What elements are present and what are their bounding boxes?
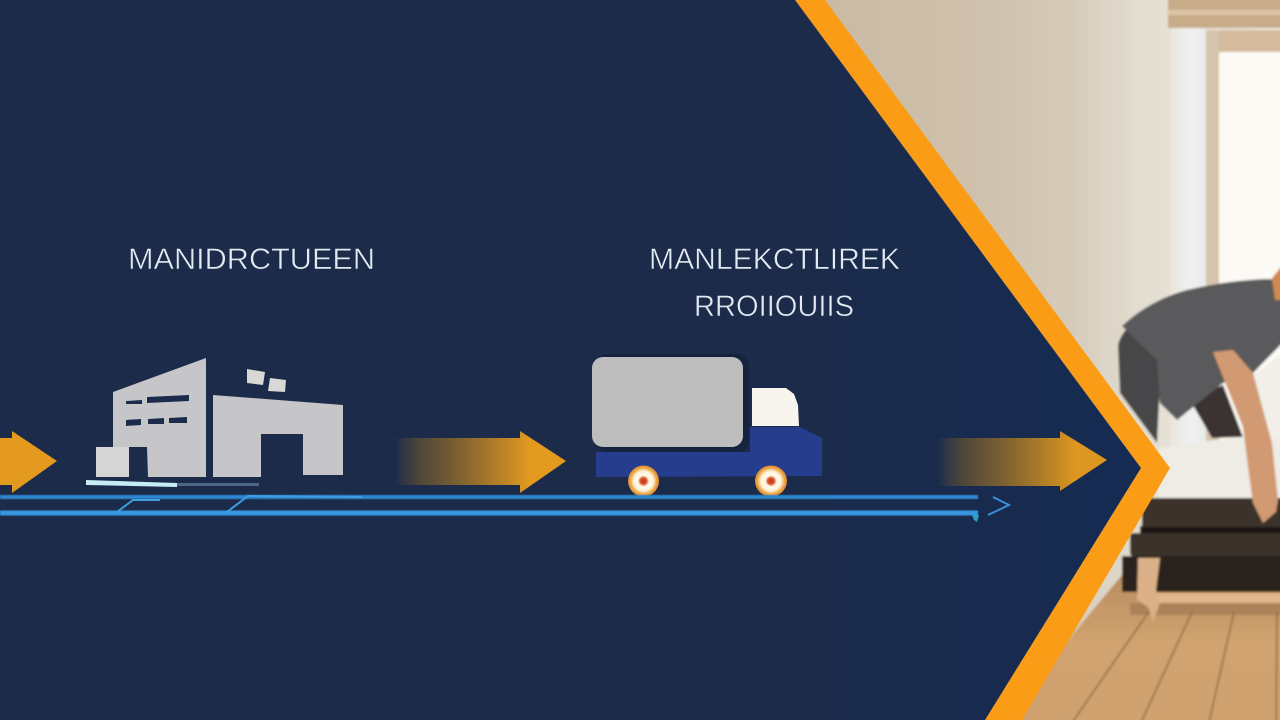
front wheel bbox=[755, 466, 787, 496]
right factory block bbox=[213, 395, 343, 477]
cargo box shadow bbox=[596, 354, 749, 452]
rear wheel bbox=[628, 466, 659, 496]
left factory block bbox=[113, 358, 206, 477]
heading: second step label: MANLEKCTLIREK bbox=[649, 243, 900, 276]
bed bbox=[1122, 498, 1280, 622]
person bbox=[1118, 262, 1280, 523]
wooden floor bbox=[985, 575, 1280, 720]
icon: delivery truck bbox=[592, 354, 822, 496]
cargo box bbox=[592, 357, 743, 447]
arrow: truck to customer bbox=[937, 431, 1107, 491]
icon: factory building bbox=[86, 358, 343, 487]
truck chassis and cab bbox=[596, 427, 822, 477]
arrow: incoming orange arrow bbox=[0, 431, 57, 493]
window cornice bbox=[1168, 0, 1280, 450]
small annex box bbox=[96, 447, 129, 477]
heading: first step label: MANIDRCTUEEN bbox=[128, 243, 375, 276]
factory base line bbox=[86, 480, 259, 487]
heading: second step label: RROIIOUIIS bbox=[694, 290, 854, 323]
cab window bbox=[752, 388, 799, 426]
curtain bbox=[1170, 28, 1206, 448]
factory windows bbox=[126, 395, 189, 426]
heading: second step label bbox=[649, 243, 900, 323]
arrow: factory to truck bbox=[395, 431, 566, 493]
window bbox=[1219, 52, 1280, 452]
pillow bbox=[1158, 437, 1280, 498]
background bedding bbox=[1254, 340, 1280, 440]
panel: bedroom photo scene bbox=[780, 0, 1280, 720]
icon: road chevron bbox=[988, 497, 1009, 515]
floating squares bbox=[247, 369, 286, 392]
road lines bbox=[0, 495, 1009, 522]
